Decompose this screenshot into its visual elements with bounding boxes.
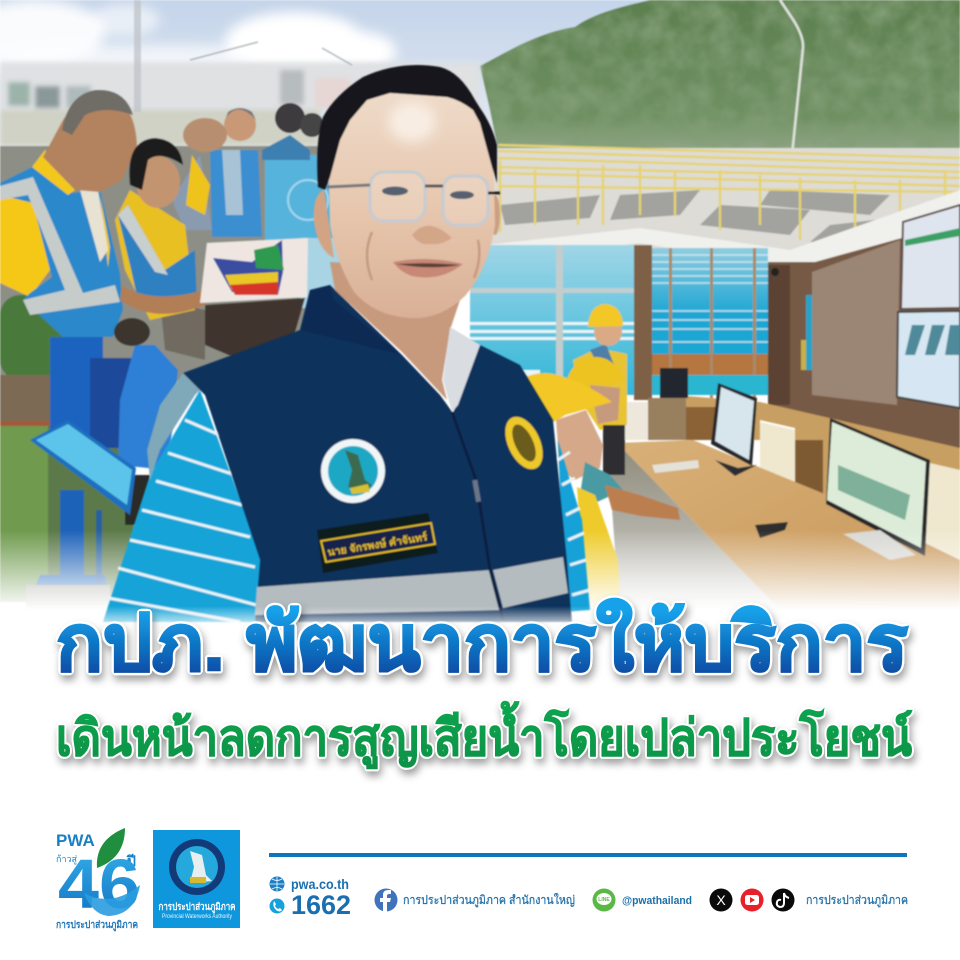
arm (605, 485, 680, 520)
website contact (270, 876, 349, 892)
eyes (382, 186, 474, 199)
towards label: ก้าวสู่ (56, 854, 78, 865)
LINE link (592, 888, 692, 912)
front helmet (523, 373, 612, 422)
icon: facebook (374, 888, 398, 912)
footer rule (269, 853, 907, 857)
right sleeve with stripes (558, 440, 590, 612)
wooden pillars and wall (634, 222, 960, 480)
glasses (327, 172, 500, 225)
vest lining (147, 373, 205, 480)
network map held by workers (200, 238, 308, 303)
wall screens (897, 205, 960, 408)
smile lines (367, 232, 479, 280)
badge name English: Provincial Waterworks Authority (162, 913, 233, 920)
white fade across lower figure (0, 606, 960, 630)
icon: YouTube (740, 888, 764, 912)
icon: X: X (716, 892, 726, 908)
collar left trim (300, 285, 402, 355)
second worker in yellow shirt (115, 138, 205, 320)
icon: phone (270, 898, 284, 914)
neck (330, 262, 470, 400)
street lamp (780, 0, 803, 155)
face (328, 82, 495, 318)
mouth (393, 259, 463, 278)
organisation name: การประปาส่วนภูมิภาค (56, 919, 138, 932)
pump cabinet (50, 337, 132, 448)
white collar (443, 327, 480, 412)
nose (412, 226, 452, 244)
back counter and shelving (624, 368, 960, 560)
badge name Thai: การประปาส่วนภูมิภาค (158, 901, 236, 914)
PWA label: PWA (56, 831, 95, 850)
blinds window (652, 248, 768, 398)
headline: blue: กปภ. พัฒนาการให้บริการ (56, 598, 908, 687)
striped shirt (580, 462, 623, 503)
small desk monitor (652, 383, 757, 476)
front worker in yellow shirt (0, 90, 137, 337)
hair (317, 65, 497, 190)
green hill (480, 0, 960, 157)
ceiling band (485, 190, 960, 268)
large desk monitor (755, 418, 930, 560)
faded road and buildings (0, 0, 480, 184)
sky with clouds (0, 0, 960, 160)
seated engineers (523, 357, 680, 610)
left chest emblem (321, 439, 385, 503)
zipper (452, 412, 503, 620)
photo collage background (0, 0, 960, 649)
icon: X (710, 888, 732, 912)
icon: globe (270, 876, 284, 892)
left sleeve with stripes (103, 390, 262, 622)
headline: blue: กปภ. พัฒนาการให้บริการ (56, 598, 908, 687)
reflective strip right (493, 557, 568, 608)
hotline contact (270, 890, 351, 920)
zipper pull (472, 480, 481, 502)
number 46: 46 (58, 845, 140, 923)
seal (169, 839, 225, 895)
reflective strip left (255, 570, 500, 615)
white fade at lower edge of photo (0, 530, 960, 610)
Facebook link (374, 888, 575, 912)
line handle: @pwathailand (622, 895, 692, 907)
standing engineer (573, 304, 627, 475)
shadowed ground behind left workers (0, 146, 330, 440)
desk front in shadow (610, 443, 790, 620)
leaf (97, 828, 125, 868)
PWA 46 years logo (56, 828, 140, 932)
other social links (710, 888, 908, 912)
water swoosh (84, 885, 140, 916)
window wall (470, 245, 635, 395)
name tag (317, 513, 438, 573)
website address: pwa.co.th (291, 877, 349, 892)
worker in blue jacket (114, 318, 178, 525)
icon: TikTok (772, 888, 794, 912)
social account name: การประปาส่วนภูมิภาค (806, 893, 908, 908)
name tag: นาย จักรพงษ์ คำจันทร์ (327, 530, 429, 559)
Provincial Waterworks Authority badge (153, 830, 240, 928)
front engineer face (556, 410, 603, 480)
hotline number: 1662 (291, 890, 351, 920)
year label: ปี (126, 853, 136, 869)
platform with yellow railings (490, 145, 960, 258)
navy vest (183, 285, 572, 622)
main wooden desk (617, 440, 960, 620)
ears (314, 190, 500, 258)
yellow safety vest (577, 487, 620, 610)
right chest yellow emblem (498, 411, 550, 475)
facebook page name: การประปาส่วนภูมิภาค สำนักงานใหญ่ (403, 893, 575, 908)
left worker group, background figures (160, 103, 350, 360)
second helmet and face (590, 385, 620, 424)
central portrait figure (103, 65, 590, 622)
information panel on post (26, 420, 136, 610)
icon: line: LINE (598, 897, 610, 903)
forehead highlight (388, 102, 436, 142)
bush and grass (0, 295, 135, 602)
